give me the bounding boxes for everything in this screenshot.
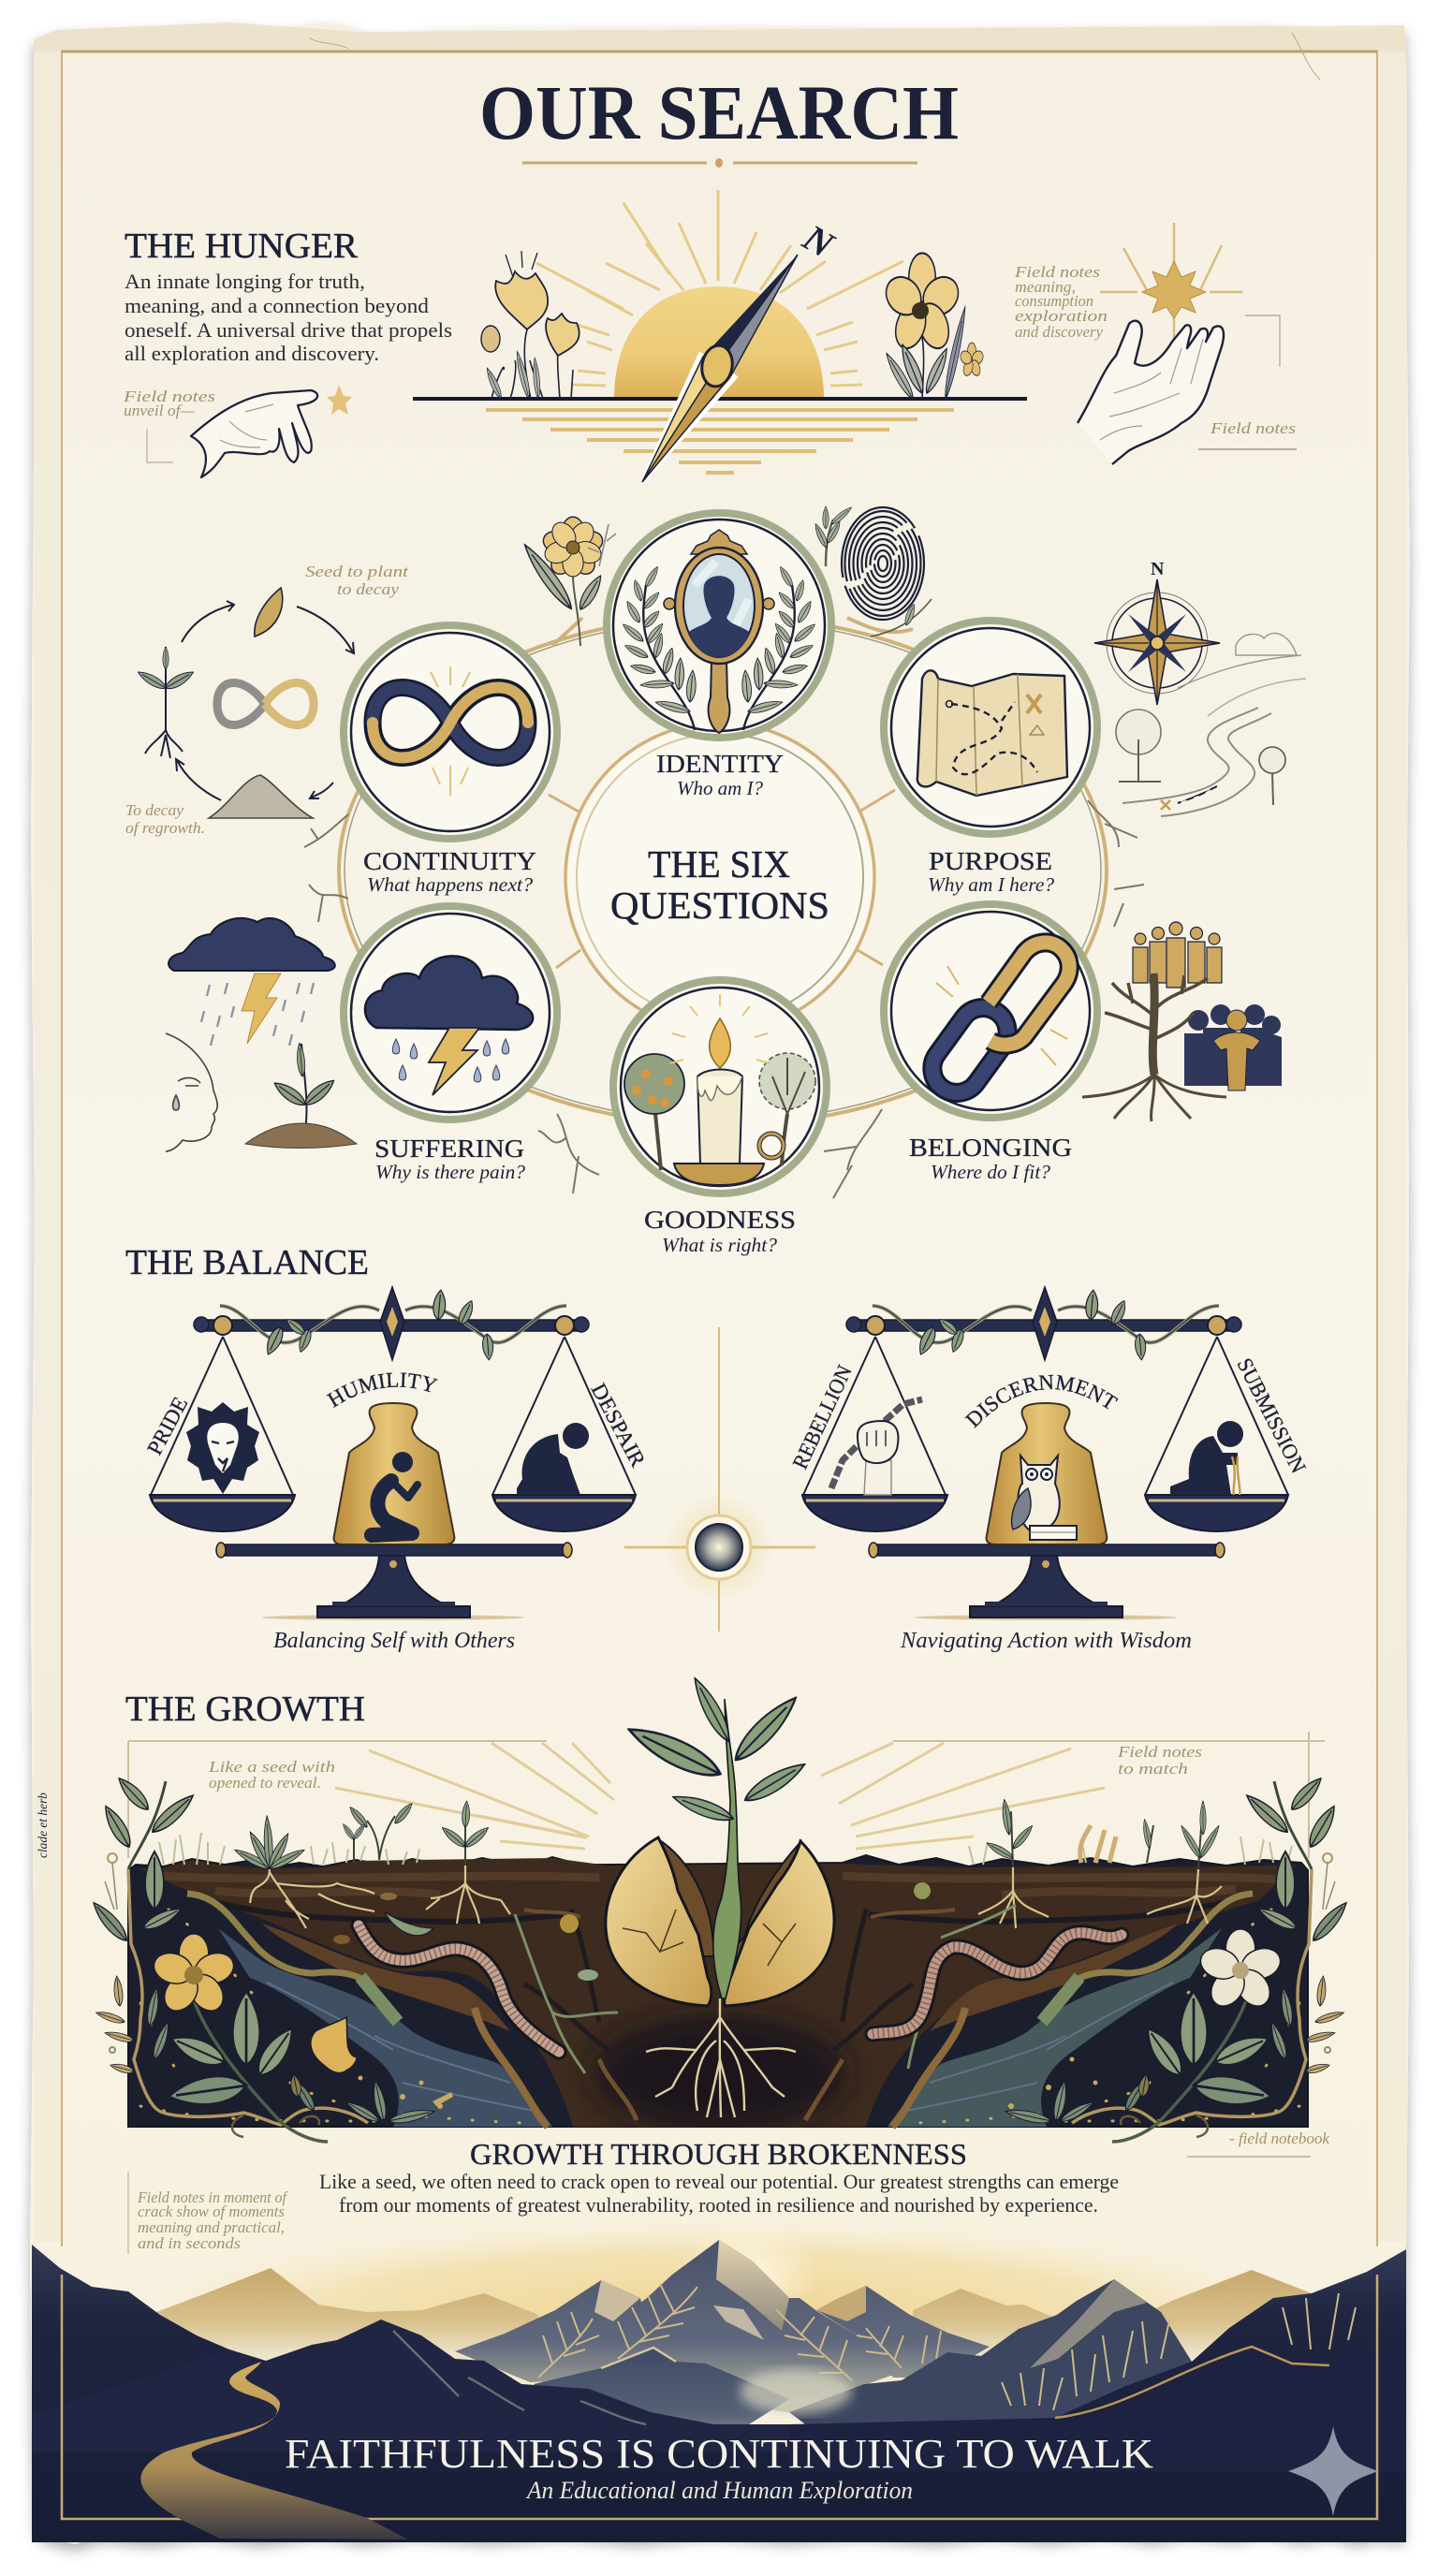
field notes: lower right of hunger — [1198, 419, 1297, 449]
label: belonging: BELONGING — [909, 1134, 1072, 1162]
centre label: the six questions: THE SIX — [648, 842, 790, 886]
label: submission: SUBMISSION — [1233, 1354, 1311, 1477]
label: humility: HUMILITY — [326, 1372, 438, 1408]
icon: submissive kneeling figure — [1170, 1421, 1243, 1495]
footer headline: FAITHFULNESS IS CONTINUING TO WALK — [285, 2431, 1153, 2477]
illustration: compass rose — [1094, 559, 1220, 705]
field notes: lower left note: Field notes in moment of — [137, 2188, 288, 2206]
label: goodness: What is right? — [662, 1234, 777, 1256]
buried leaves and pebbles — [333, 1882, 1097, 2109]
growth body text: Like a seed, we often need to crack open to reveal our potential. Our greatest strengths can emerge — [319, 2170, 1119, 2193]
right mid mountain range — [789, 2279, 1217, 2452]
field notes: to match — [1117, 1743, 1202, 1778]
field notes: to match: to match — [1118, 1760, 1188, 1778]
vertical margin note: clade et herb — [37, 1793, 51, 1858]
field notes: upper right — [1014, 263, 1280, 367]
inner husk — [658, 1839, 800, 1956]
illustration: rooted tree — [1082, 973, 1226, 1121]
field notes: like a seed: opened to reveal. — [209, 1774, 321, 1792]
fruit tree — [624, 1054, 684, 1170]
field notes: left: unveil of— — [124, 402, 196, 419]
illustration: community of people — [1133, 922, 1282, 1090]
field notes: upper right: exploration — [1015, 307, 1108, 325]
sprouting cracked seed — [606, 1675, 834, 2117]
section: the growth heading: THE GROWTH — [125, 1690, 365, 1729]
raindrops — [392, 1039, 509, 1082]
mist at base of peaks — [740, 2369, 852, 2414]
label: suffering — [374, 1134, 526, 1183]
left rock strata — [140, 1894, 571, 2127]
field notes: seed to plant: Seed to plant — [305, 563, 410, 580]
field notes: left — [123, 388, 215, 462]
illustration: compass rose: N — [1151, 559, 1165, 579]
field notes: decay and regrowth: of regrowth. — [125, 819, 205, 837]
gold weight — [987, 1403, 1107, 1544]
storm cloud — [365, 956, 533, 1030]
field notes: lower left note — [128, 2172, 288, 2254]
small infinity — [217, 683, 314, 724]
hunger body text: meaning, and a connection beyond — [125, 294, 429, 317]
label: belonging: Where do I fit? — [931, 1161, 1051, 1183]
lightning bolt — [429, 1028, 479, 1095]
field notes: lower left note: and in seconds — [138, 2234, 241, 2252]
label: goodness — [644, 1206, 796, 1256]
field notes: decay and regrowth — [125, 801, 205, 837]
seed roots — [646, 1998, 796, 2117]
label: discernment: DISCERNMENT — [964, 1374, 1118, 1428]
field notes: lower right of hunger: Field notes — [1210, 419, 1296, 437]
main peak — [562, 2240, 893, 2412]
label: pride: PRIDE — [142, 1393, 192, 1458]
praying figure — [372, 1452, 418, 1535]
laurel leaves, right — [741, 565, 817, 730]
white flower in soil — [1196, 1929, 1284, 2012]
field notes: lower left note: crack show of moments — [138, 2203, 285, 2220]
growth scene brackets and rays — [128, 1732, 1325, 1858]
label: purpose: PURPOSE — [929, 847, 1052, 875]
label: identity — [656, 750, 784, 799]
sky glow — [121, 2218, 1319, 2406]
field notes: to match: Field notes — [1117, 1743, 1202, 1761]
field notes: like a seed — [208, 1758, 335, 1792]
gold ridge highlight — [1055, 2347, 1329, 2418]
icon: lion — [186, 1402, 259, 1494]
brown earth layer — [139, 1858, 1297, 2127]
central soil texture — [524, 1910, 955, 2120]
caption: navigating action with wisdom: Navigating Action with Wisdom — [900, 1629, 1192, 1653]
dark front peaks, right — [789, 2347, 1406, 2471]
centre circle — [565, 723, 874, 1032]
icon: reaching hand, left — [191, 390, 317, 477]
field notes: upper right: consumption — [1015, 292, 1093, 310]
circle: suffering — [344, 906, 557, 1120]
sprout stem — [713, 1699, 741, 1998]
underground soil cross-section — [128, 1855, 1308, 2131]
field notes: field notebook: - field notebook — [1229, 2130, 1329, 2147]
label: belonging — [909, 1134, 1072, 1183]
illustration: life cycle, seed to regrowth — [136, 588, 354, 818]
compass north letter: N — [796, 215, 843, 267]
gold weight — [334, 1403, 454, 1544]
right-side gold peaks — [913, 2270, 1312, 2359]
left scale: humility — [142, 1284, 651, 1620]
cycle arrows — [176, 601, 354, 800]
left-side gold peaks — [156, 2268, 571, 2359]
centre label: the six questions: QUESTIONS — [610, 884, 829, 927]
dark hollow beneath seed — [594, 2015, 846, 2131]
laurel leaves, left — [621, 565, 697, 730]
gold grass sprigs — [538, 2284, 1356, 2410]
right rock strata — [869, 1894, 1299, 2127]
mirror — [664, 530, 774, 733]
mountain landscape footer — [32, 2218, 1406, 2542]
label: continuity: What happens next? — [367, 873, 534, 896]
field notes: lower left note: meaning and practical, — [138, 2218, 285, 2236]
label: identity: IDENTITY — [656, 750, 784, 778]
treasure map — [917, 670, 1067, 796]
gold leaf-flower in soil — [311, 2017, 357, 2073]
sprout — [136, 647, 196, 758]
right seed half — [725, 1841, 834, 2006]
centre label: the six questions — [610, 842, 829, 927]
circle: continuity — [344, 625, 557, 839]
hunger body text: An innate longing for truth, — [125, 270, 365, 293]
icon: fingerprint — [842, 507, 924, 620]
icon: gold flower with leaves — [520, 505, 616, 646]
heading: growth through brokenness: GROWTH THROUGH BROKENNESS — [470, 2137, 967, 2171]
field notes: seed to plant: to decay — [337, 580, 400, 598]
small plants above the soil line — [159, 1799, 1292, 1872]
field notes: upper right: Field notes — [1014, 263, 1100, 281]
growth body text — [319, 2170, 1119, 2217]
right ornamental vine — [1005, 1774, 1351, 2142]
peak glow — [679, 2223, 819, 2326]
illustration: sprout in mound — [245, 1043, 357, 1148]
footer subtitle: An Educational and Human Exploration — [525, 2477, 913, 2504]
field notes: decay and regrowth: To decay — [125, 801, 183, 819]
icon: small gold star — [327, 385, 352, 415]
right scale: discernment — [788, 1284, 1311, 1620]
label: rebellion: REBELLION — [788, 1361, 857, 1472]
dark surround, left and right — [32, 2245, 1406, 2542]
sunrise with rays — [413, 190, 1027, 473]
icon: flowers right of the sun — [883, 253, 984, 401]
field notes: left: Field notes — [123, 388, 215, 405]
field notes: upper right: meaning, — [1015, 278, 1076, 296]
circle: purpose — [884, 621, 1097, 834]
label: purpose — [928, 847, 1054, 896]
illustration: winding road landscape — [1116, 633, 1306, 816]
label: continuity — [363, 847, 536, 896]
four-point star mark — [1288, 2426, 1378, 2516]
root clusters — [250, 1866, 1222, 1928]
right mid peak (gold tip) — [816, 2286, 990, 2378]
inner border at footer — [62, 2275, 1377, 2519]
illustration: tearful face — [166, 1033, 217, 1151]
label: goodness: GOODNESS — [644, 1206, 796, 1234]
left peak lit face — [594, 2280, 640, 2321]
chain links — [923, 943, 1069, 1103]
six questions wheel — [304, 616, 1144, 1198]
title divider — [522, 158, 917, 168]
divider with orb — [624, 1327, 815, 1632]
field notes: like a seed: Like a seed with — [208, 1758, 335, 1776]
growth body text: from our moments of greatest vulnerability, rooted in resilience and nourished by experience. — [339, 2193, 1098, 2217]
spokes — [549, 790, 895, 968]
label: identity: Who am I? — [677, 777, 763, 799]
title: OUR SEARCH — [479, 69, 959, 155]
infinity symbol — [373, 687, 528, 758]
left seed half — [606, 1837, 712, 2006]
icon: raised fist breaking chain — [831, 1399, 922, 1495]
gold flower in soil — [150, 1934, 238, 2017]
section: the hunger heading: THE HUNGER — [125, 227, 359, 266]
sprout leaves — [624, 1675, 809, 1825]
front centre peak — [534, 2348, 789, 2424]
section: the balance heading: THE BALANCE — [125, 1243, 369, 1282]
candle flame glow — [670, 994, 770, 1063]
icon: reaching hand, upper right — [1078, 321, 1224, 464]
seed — [255, 588, 283, 637]
green side roots — [515, 1905, 1016, 2073]
illustration: storm cloud with rain — [169, 918, 335, 1046]
earthworms — [359, 1925, 1122, 2052]
label: suffering: SUFFERING — [374, 1134, 524, 1163]
icon: compass needle — [642, 255, 798, 482]
main peak lit face — [716, 2240, 789, 2331]
left mid peak — [455, 2280, 655, 2382]
icon: despairing figure — [517, 1423, 589, 1495]
circle: belonging — [884, 904, 1097, 1118]
dark front peaks, left — [32, 2320, 936, 2452]
soil base — [128, 1855, 1308, 2127]
topsoil streaks — [159, 1876, 1283, 1895]
field notes: upper right: and discovery — [1015, 323, 1103, 341]
icon: sprig beside fingerprint — [813, 505, 932, 637]
hunger body text: all exploration and discovery. — [125, 342, 379, 365]
compost mound — [209, 775, 313, 818]
hunger body text: oneself. A universal drive that propels — [125, 318, 452, 342]
circle: identity — [607, 513, 831, 738]
caption: balancing self with others: Balancing Self with Others — [273, 1629, 515, 1653]
label: purpose: Why am I here? — [928, 873, 1054, 896]
hunger body text — [125, 270, 452, 365]
owl on books — [1012, 1456, 1077, 1540]
label: suffering: Why is there pain? — [375, 1161, 526, 1183]
label: despair: DESPAIR — [587, 1380, 651, 1471]
outer gold ring with twigs — [304, 616, 1144, 1198]
leafy tree — [759, 1053, 815, 1165]
icon: gold star, upper right — [1100, 223, 1242, 355]
label: continuity: CONTINUITY — [363, 847, 536, 875]
icon: flowers left of the sun — [481, 251, 580, 400]
field notes: seed to plant — [305, 563, 410, 598]
candle — [674, 1018, 784, 1185]
winding gold road — [140, 2362, 408, 2539]
circle: goodness — [613, 980, 827, 1193]
left ornamental vine — [89, 1774, 435, 2142]
